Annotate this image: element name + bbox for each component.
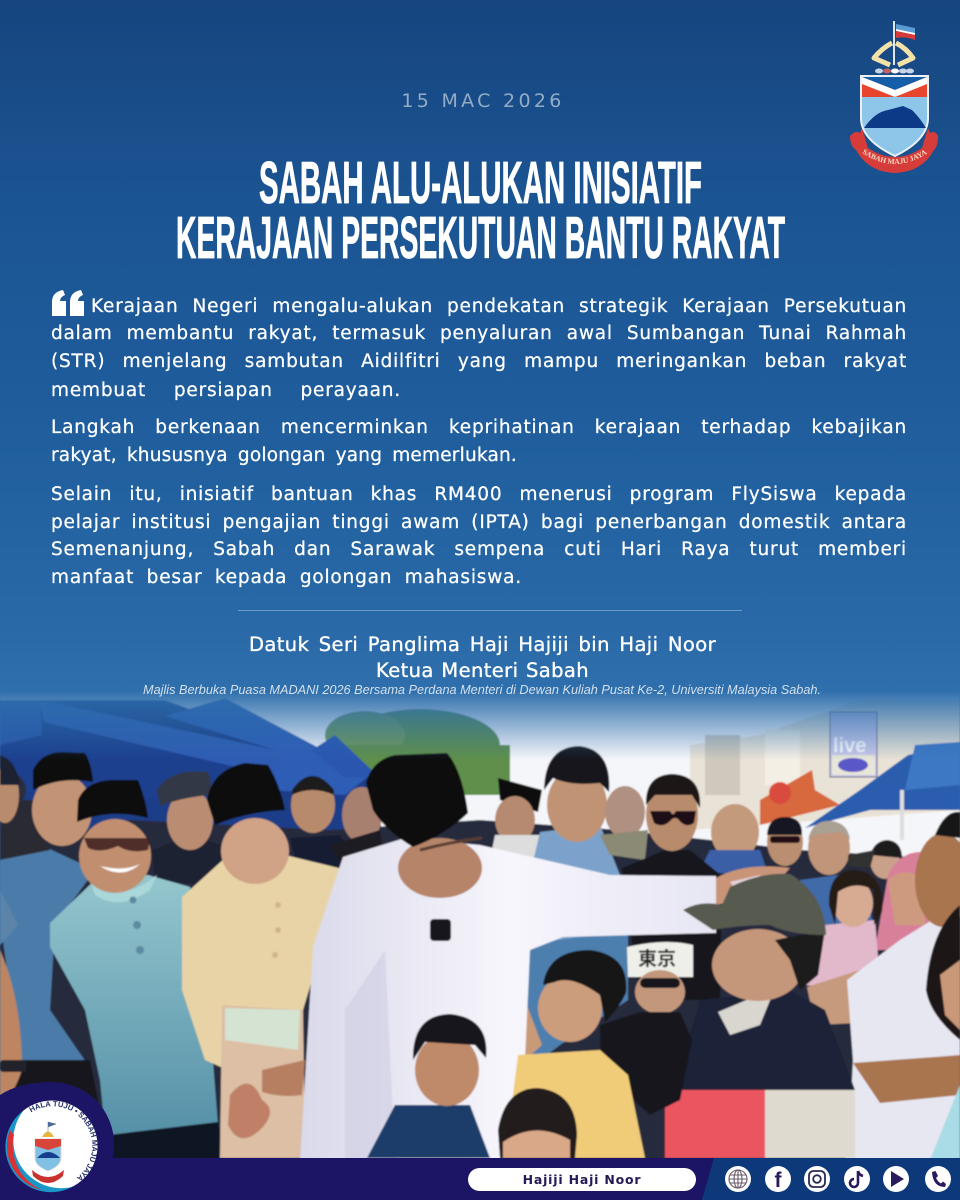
small crest: [32, 1122, 64, 1183]
attribution: name and role: Datuk Seri Panglima Haji Hajiji bin Haji Noor: [249, 633, 716, 656]
name pill: [468, 1168, 696, 1191]
girl held in arms: [805, 870, 882, 990]
arms holding the flag: [874, 43, 913, 65]
man in white baju reaching out: [300, 753, 790, 1160]
building sign: live: [833, 735, 866, 757]
man in blue baju at far left: [0, 752, 110, 1160]
footer bar: [0, 1158, 960, 1200]
child head at bottom centre: [498, 1088, 577, 1158]
man in blue shirt: [505, 746, 628, 1075]
text block: paragraph 2: [51, 417, 907, 466]
text block: paragraph 1: membuat persiapan perayaan.: [51, 380, 401, 401]
icon: youtube play: [883, 1166, 909, 1192]
boy with cap and polo shirt: [665, 874, 855, 1158]
man in teal baju with spectacles: [50, 780, 224, 1160]
small boy in navy t-shirt: [367, 1014, 490, 1158]
background man with songkok: [0, 772, 545, 860]
tents left: [0, 698, 385, 855]
child with Tokyo hat: [600, 942, 693, 1115]
ribbon: SABAH MAJU JAYA: [862, 150, 928, 164]
name pill: Hajiji Haji Noor: [523, 1172, 641, 1187]
crescent swoosh: [5, 1110, 72, 1192]
footer social panel: [702, 1158, 960, 1200]
text block: paragraph 3: pelajar institusi pengajian tinggi awam (IPTA) bagi penerbangan domestik antara: [51, 512, 907, 533]
text block: paragraph 3: [51, 484, 907, 588]
flag on pole: [893, 21, 915, 65]
girl with long hair at right edge: [926, 905, 960, 1160]
text block: paragraph 1: dalam membantu rakyat, termasuk penyaluran awal Sumbangan Tunai Rahmah: [51, 323, 907, 344]
photo: crowd at the event: [0, 694, 960, 1158]
child with Tokyo hat: 東京: [638, 948, 676, 970]
text block: paragraph 3: Selain itu, inisiatif bantuan khas RM400 menerusi program FlySiswa kepada: [51, 484, 907, 505]
man in beige baju and floral sampin: [182, 763, 347, 1158]
beads: [875, 68, 914, 74]
text block: paragraph 3: Semenanjung, Sabah dan Sarawak sempena cuti Hari Raya turut memberi: [51, 539, 907, 560]
bystander with beard: [800, 821, 880, 950]
sky: [0, 690, 960, 1160]
text block: paragraph 3: manfaat besar kepada golongan mahasiswa.: [51, 567, 522, 588]
trees: [320, 709, 510, 795]
security guard with beret: [152, 771, 230, 885]
icon: facebook: f: [774, 1169, 782, 1192]
text block: paragraph 1: [51, 296, 907, 401]
icon: phone: [925, 1166, 951, 1192]
background men right of blue shirt: [600, 786, 770, 880]
text block: paragraph 2: Langkah berkenaan mencerminkan keprihatinan kerajaan terhadap kebajikan: [51, 417, 907, 438]
text block: paragraph 2: rakyat, khususnya golongan yang memerlukan.: [51, 445, 517, 466]
icon: Sabah state crest: [850, 21, 938, 173]
tents right: [805, 742, 960, 840]
text block: paragraph 1: Kerajaan Negeri mengalu-alukan pendekatan strategik Kerajaan Persekutuan: [91, 296, 907, 317]
date: 15 MAC 2026: [401, 90, 565, 112]
background crowd base: [0, 820, 960, 1160]
boy in yellow shirt: [505, 950, 645, 1158]
ribbon: [850, 128, 938, 173]
man in white t-shirt at right: [807, 812, 960, 1160]
attribution: name and role: [249, 633, 716, 682]
badge: Hala Tuju logo: [0, 1082, 114, 1192]
fade from blue background into the photo: [0, 690, 960, 760]
man at far left edge: [0, 755, 26, 1100]
icon: instagram: [804, 1166, 830, 1192]
man with cap and sunglasses: [767, 817, 803, 866]
building sign: [830, 712, 877, 777]
title: [176, 150, 785, 271]
background man in dark clothes: [290, 776, 385, 880]
icon: website globe: [725, 1166, 751, 1192]
icon: facebook: [765, 1166, 791, 1192]
circular slogan: HALA TUJU • SABAH MAJU JAYA: [29, 1101, 98, 1180]
icon: quotation mark: [52, 290, 84, 316]
buildings: [690, 700, 960, 830]
background children right: [848, 840, 902, 879]
man with sunglasses: [622, 774, 722, 1000]
attribution: name and role: Ketua Menteri Sabah: [376, 659, 589, 682]
woman in pink hijab: [875, 852, 940, 950]
icon: tiktok: [844, 1166, 870, 1192]
shield: [861, 76, 928, 156]
text block: paragraph 1: (STR) menjelang sambutan Aidilfitri yang mampu meringankan beban rakyat: [51, 351, 907, 372]
caption: Majlis Berbuka Puasa MADANI 2026 Bersama Perdana Menteri di Dewan Kuliah Pusat Ke-2, Universiti Malaysia Sabah.: [143, 683, 821, 697]
